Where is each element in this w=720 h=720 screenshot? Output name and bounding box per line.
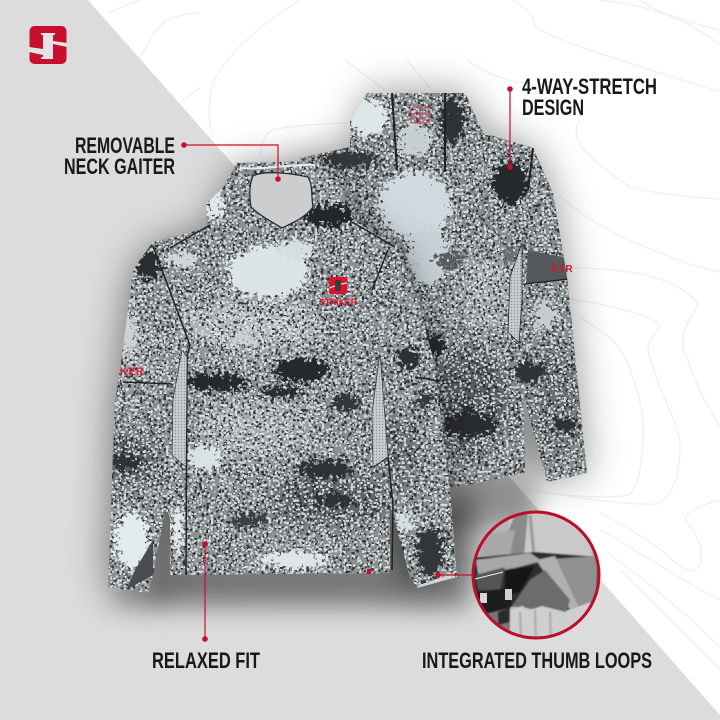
- front jacket shadow: [108, 165, 457, 597]
- callout: removable neck gaiter: NECK GAITER: [64, 154, 175, 179]
- front tonal patches: [106, 301, 420, 526]
- back camo texture: [300, 93, 587, 488]
- label: 4-WAY-STRETCH: [522, 74, 657, 99]
- back hood seams: [392, 93, 533, 190]
- cuff patches: [126, 540, 153, 590]
- callout: relaxed fit: [152, 541, 260, 673]
- chest logo: [319, 277, 357, 307]
- logo: S mark: [29, 26, 67, 64]
- callout: 4-way stretch: DESIGN: [522, 95, 584, 120]
- back side mesh panel: [508, 243, 522, 343]
- left sleeve wordmark: KER: [120, 366, 144, 378]
- back jacket shadow: [300, 93, 587, 488]
- neck gaiter interior: [250, 173, 313, 228]
- circular photo inset: [470, 510, 602, 642]
- callout: 4-way stretch: [507, 74, 657, 170]
- right side mesh panel: [372, 353, 388, 467]
- back camo blotches: [322, 96, 577, 437]
- callout: integrated thumb loops: [422, 510, 652, 673]
- back jacket: [290, 85, 600, 495]
- back hood logo: [411, 107, 429, 123]
- ground shadow beneath the jackets: [115, 480, 535, 608]
- front jacket: [100, 155, 465, 600]
- left side mesh panel: [172, 350, 187, 467]
- back tonal patches: [430, 250, 577, 450]
- front camo texture: [100, 155, 465, 600]
- label: RELAXED FIT: [152, 648, 260, 673]
- front jacket seams: [123, 222, 440, 575]
- chest wordmark: STRIKER: [319, 297, 357, 307]
- label: REMOVABLE: [75, 133, 175, 158]
- hem tag: [367, 569, 371, 574]
- leader line: [438, 574, 473, 576]
- leader line: [184, 145, 278, 179]
- leader line: [204, 544, 206, 639]
- gaiter collar stripe: [240, 165, 315, 168]
- back sleeve wordmark: STR: [551, 264, 573, 275]
- leader line: [509, 89, 511, 167]
- back upper sleeve band: [526, 250, 568, 284]
- front camo blotches: [109, 190, 443, 576]
- callout: removable neck gaiter: [64, 133, 281, 182]
